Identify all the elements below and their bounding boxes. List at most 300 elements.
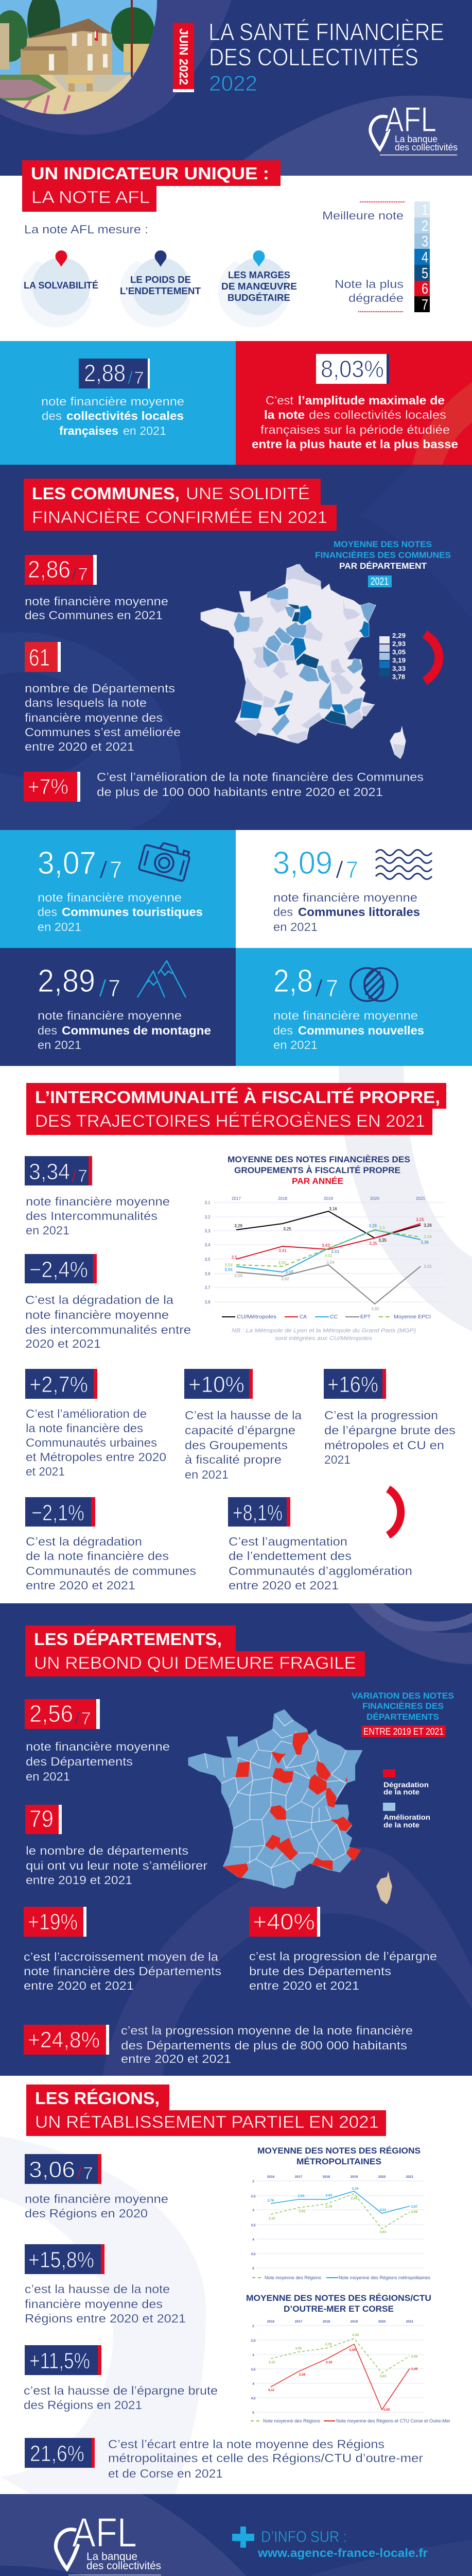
text: accroissement moyen: note financière des Départements [24, 1964, 221, 1978]
text: départements améliorés [25, 682, 181, 753]
chart: groupements à fiscalité propre: 3,35 [369, 1241, 377, 1246]
stat: 3,06/7 [25, 2154, 101, 2184]
text: 800 000 habitants: c’est la progression moyenne de la note financière [121, 2024, 413, 2037]
map legend: 2,93 [392, 640, 406, 648]
stat: +8,1%: +8,1% [233, 1500, 283, 1526]
text: épargne brute: de l’épargne brute des [324, 1423, 456, 1437]
panel: communes littorales: des [273, 905, 293, 919]
chart: groupements à fiscalité propre: 3,29 [234, 1224, 242, 1228]
panel: amplitude maximale: françaises sur la période étudiée [260, 423, 450, 436]
text: départements améliorés: entre 2020 et 2021 [25, 740, 134, 753]
panel: communes littorales: Communes littorales [298, 905, 420, 919]
stat: +19%: +19% [28, 1909, 78, 1935]
chart: régions métropolitaines: 2,87 [411, 2205, 418, 2209]
stat: +11,5%: +11,5% [29, 2348, 90, 2374]
stat: 2,86/7: 7 [78, 565, 88, 584]
text: communautés de communes: de la note financière des [26, 1549, 169, 1563]
panel: amplitude maximale: la note [264, 408, 305, 421]
chart: groupements à fiscalité propre: 3,59 [234, 1274, 242, 1278]
chart: groupements à fiscalité propre: 3,35 [378, 1238, 387, 1243]
chart: groupements à fiscalité propre: 3,29 [369, 1224, 377, 1228]
chart: groupements à fiscalité propre: GROUPEMENTS À FISCALITÉ PROPRE [234, 1165, 400, 1175]
chart: groupements à fiscalité propre: 2018 [278, 1196, 287, 1201]
map title: variation départements: FINANCIÈRES DES [362, 1701, 444, 1711]
text: 100 000 habitants: C’est l’amélioration de la note financière des Communes [97, 770, 424, 784]
decorative red arc [388, 1489, 401, 1535]
stat: 21,6%: 21,6% [30, 2441, 84, 2466]
panel: amplitude maximale [236, 341, 472, 465]
map: France communes [201, 564, 406, 759]
stat: 61 [25, 642, 61, 672]
chart: groupements à fiscalité propre: 3,43 [331, 1249, 339, 1254]
chart: régions métropolitaines: 2,63 [298, 2194, 305, 2198]
intro text: La note AFL mesure : [24, 223, 148, 236]
panel: communes littorales: 3,09 [273, 845, 333, 881]
chart: groupements à fiscalité propre: 2020 [370, 1196, 379, 1201]
stat: 3,34/7 [25, 1156, 92, 1186]
text: note régions [25, 2192, 168, 2220]
text: 800 000 habitants: des Départements de plus de 800 000 habitants [121, 2039, 407, 2052]
title: LA SANTÉ FINANCIÈRE [208, 18, 444, 45]
text: communautés urbaines [26, 1407, 166, 1478]
chart note [232, 1328, 416, 1342]
map legend: de la note [383, 1821, 419, 1829]
stat: -2,1%: −2,1% [31, 1500, 84, 1526]
text: endettement: de l’endettement des [229, 1549, 352, 1563]
chart: groupements à fiscalité propre: MOYENNE DES NOTES FINANCIÈRES DES [228, 1155, 410, 1164]
panel: communes de montagne: des [38, 1024, 57, 1037]
chart: régions métropolitaines: 3,15 [269, 2217, 275, 2221]
measure: solvabilité: LA SOLVABILITÉ [24, 280, 98, 291]
text: épargne brute régions: des Régions en 2021 [24, 2398, 142, 2412]
chart legend: CA [300, 1314, 307, 1320]
text: accroissement moyen: entre 2020 et 2021 [24, 1979, 134, 1992]
stat: 3,34/7: 7 [78, 1166, 88, 1186]
chart: régions métropolitaines: 2018 [323, 2175, 330, 2179]
chart: régions métropolitaines: 2,34 [352, 2187, 359, 2191]
chart: régions métropolitaines: MÉTROPOLITAINES [296, 2157, 381, 2166]
stat: 2,86/7: 2,86 [28, 556, 71, 583]
logo AFL: La banque [395, 134, 438, 144]
panel: départements [0, 1603, 472, 2076]
footer [0, 2494, 472, 2576]
chart legend: CU/Métropoles [237, 1314, 276, 1320]
chart: groupements à fiscalité propre: 3,62 [281, 1277, 289, 1281]
title [208, 18, 444, 95]
chart note: NB : La Métropole de Lyon et la Métropole du Grand Paris (MGP) [232, 1328, 416, 1334]
map: Corsica [376, 1871, 392, 1904]
stat: -2,4%: −2,4% [29, 1257, 88, 1282]
text: épargne brute départements [249, 1950, 437, 1992]
text: 800 000 habitants [121, 2024, 413, 2065]
map title: communes par département [315, 539, 451, 587]
chart: groupements à fiscalité propre: 3,43 [322, 1243, 330, 1248]
chart: régions outre-mer et Corse [246, 2293, 450, 2424]
stat: 2,88/7 [79, 359, 150, 388]
stat: 3,06/7: 7 [83, 2164, 93, 2183]
stat: 61: 61 [29, 644, 50, 671]
panel: communes littorales: note financière moyenne [273, 891, 417, 904]
stat: 2,56/7: / [75, 1709, 80, 1728]
text: épargne brute régions: c’est la hausse de l’épargne brute [24, 2384, 218, 2397]
panel: régions [0, 2084, 450, 2494]
stat: 2,56/7: 2,56 [29, 1700, 73, 1727]
logo AFL [56, 2510, 161, 2575]
panel: amplitude maximale: l’amplitude maximale de [298, 394, 445, 407]
panel: amplitude maximale: C’est [266, 394, 294, 407]
heading: un indicateur unique: UN INDICATEUR UNIQUE : [31, 164, 269, 183]
stat: 3,34/7: 3,34 [29, 1159, 70, 1184]
chart: régions outre-mer et Corse: 4,11 [268, 2388, 275, 2392]
chart legend: Note moyenne des Régions et CTU Corse et Outre-Mer [336, 2418, 450, 2424]
text: capacité d'épargne: capacité d’épargne [185, 1423, 295, 1437]
chart: régions outre-mer et Corse: MOYENNE DES NOTES DES RÉGIONS/CTU [246, 2293, 431, 2303]
chart: régions métropolitaines: 2,43 [351, 2197, 358, 2200]
panel: note moyenne collectivités: collectivités locales [66, 409, 184, 422]
map legend: 3,05 [392, 648, 406, 656]
logo AFL: La banque [86, 2551, 137, 2563]
text: endettement: C’est l’augmentation [229, 1535, 347, 1548]
panel: communes nouvelles: des [273, 1024, 293, 1037]
text: épargne brute: métropoles et CU en [324, 1438, 444, 1452]
chart: régions outre-mer et Corse: 2020 [378, 2320, 386, 2324]
stat: +2,7%: +2,7% [29, 1372, 88, 1397]
stat: 79 [25, 1805, 62, 1834]
chart: régions outre-mer et Corse: 2021 [406, 2320, 414, 2324]
text: communautés urbaines: la note financière des [26, 1421, 143, 1435]
heading: régions: LES RÉGIONS, [35, 2089, 160, 2108]
heading: un indicateur unique [22, 160, 281, 212]
text: 800 000 habitants: entre 2020 et 2021 [121, 2052, 231, 2065]
chart: régions métropolitaines: 2017 [295, 2175, 303, 2179]
map: Corsica [390, 726, 406, 759]
measure: marges de manoeuvre: LES MARGES [228, 270, 290, 280]
chart: groupements à fiscalité propre: 3,5 [231, 1255, 237, 1260]
chart legend: CC [330, 1314, 338, 1320]
icon: camera [138, 839, 191, 882]
text: note régions: des Régions en 2020 [25, 2207, 148, 2220]
text: capacité d'épargne: à fiscalité propre [185, 1453, 282, 1466]
text: départements améliorés: financière moyenne des [25, 711, 163, 724]
panel: communes touristiques: Communes touristiques [62, 905, 203, 919]
chart: régions outre-mer et Corse: 2016 [267, 2320, 275, 2324]
text: dégradation [25, 1293, 191, 1350]
panel: communes touristiques: en 2021 [38, 920, 81, 934]
rating scale: 3 [422, 233, 428, 250]
panel: note moyenne collectivités: en 2021 [123, 424, 166, 437]
text: communautés de communes: C’est la dégradation [26, 1535, 142, 1548]
panel: communes de montagne: / [99, 975, 107, 1002]
panel: communes littorales [236, 830, 472, 948]
chart: régions outre-mer et Corse: 2,79 [325, 2343, 332, 2346]
chart: groupements à fiscalité propre: 3,54 [224, 1263, 233, 1267]
panel: communes touristiques: / [99, 856, 108, 883]
decorative red arc [425, 634, 439, 681]
panel: communes de montagne: 2,89 [38, 963, 95, 999]
chart: régions outre-mer et Corse: 2018 [323, 2320, 330, 2324]
chart legend: Note moyenne des Régions [265, 2275, 321, 2281]
date tag: JUIN 2022 [177, 28, 190, 85]
text: épargne brute: C’est la progression [324, 1409, 438, 1422]
text: note intercommunalités: en 2021 [26, 1224, 69, 1237]
panel: amplitude maximale: des collectivités locales [309, 408, 446, 421]
text: note départements: note financière moyenne [26, 1740, 170, 1753]
map title: communes par département: MOYENNE DES NOTES [334, 539, 432, 549]
rating scale: 7 [422, 297, 428, 313]
chart: régions outre-mer et Corse: 2,91 [295, 2347, 302, 2350]
text: 100 000 habitants: de plus de 100 000 habitants entre 2020 et 2021 [97, 785, 383, 799]
chart: régions outre-mer et Corse: D’OUTRE-MER ET CORSE [284, 2304, 394, 2314]
heading: les communes: FINANCIÈRE CONFIRMÉE EN 2021 [32, 508, 327, 527]
chart: groupements à fiscalité propre: 3,34 [424, 1234, 432, 1239]
chart: groupements à fiscalité propre: 3,26 [424, 1223, 432, 1228]
heading: régions: UN RÉTABLISSEMENT PARTIEL EN 2021 [35, 2112, 379, 2131]
logo AFL: des collectivités [86, 2560, 161, 2572]
rating scale: Meilleure note [322, 209, 404, 222]
heading: intercommunalité [26, 1083, 446, 1135]
map legend: 3,19 [392, 656, 406, 664]
text: 79 départements: qui ont vu leur note s’améliorer [26, 1859, 207, 1872]
chart: groupements à fiscalité propre: 3,7 [204, 1285, 211, 1290]
chart: régions métropolitaines: 3,06 [411, 2210, 418, 2214]
chart: groupements à fiscalité propre: 3,6 [204, 1272, 211, 1276]
text: communautés urbaines: et 2021 [26, 1465, 65, 1478]
map title: communes par département: 2021 [371, 576, 389, 587]
panel: communes touristiques: des [38, 905, 57, 919]
panel: communes nouvelles: 7 [326, 975, 338, 1002]
chart: groupements à fiscalité propre: 3,3 [379, 1226, 385, 1230]
chart: groupements à fiscalité propre: 3,36 [421, 1240, 429, 1245]
logo AFL: des collectivités [395, 142, 458, 152]
chart: régions métropolitaines: 2,5 [251, 2195, 256, 2198]
text: capacité d'épargne: C’est la hausse de la [185, 1409, 302, 1422]
measure: marges de manoeuvre: BUDGÉTAIRE [228, 292, 290, 303]
icon: waves [376, 850, 432, 879]
chart: régions métropolitaines: 2019 [351, 2175, 358, 2179]
chart: groupements à fiscalité propre: 3,1 [204, 1200, 211, 1205]
chart: groupements à fiscalité propre: 3,42 [324, 1253, 333, 1258]
heading: les communes: LES COMMUNES, [32, 484, 180, 503]
chart: groupements à fiscalité propre: 3,25 [283, 1227, 291, 1231]
stat: 3,34/7: / [72, 1166, 77, 1186]
chart: régions métropolitaines: 4 [252, 2238, 254, 2242]
chart: régions outre-mer et Corse: 2 [252, 2325, 254, 2328]
text: dégradation: des intercommunalités entre [25, 1323, 191, 1336]
chart: régions métropolitaines: 3 [252, 2209, 254, 2212]
heading: les communes [24, 479, 337, 531]
rating scale [322, 201, 430, 313]
text: endettement [229, 1535, 412, 1592]
chart legend [222, 1314, 431, 1320]
text: accroissement moyen [24, 1950, 221, 1992]
text: hausse de la note [25, 2282, 186, 2325]
text: dégradation: C’est la dégradation de la [25, 1293, 173, 1307]
map title: variation départements: DÉPARTEMENTS [366, 1712, 439, 1722]
panel: communes littorales: en 2021 [273, 920, 318, 934]
heading: régions [26, 2084, 386, 2136]
stat: +15,8%: +15,8% [28, 2247, 94, 2273]
chart: régions métropolitaines: 2,79 [326, 2205, 333, 2209]
text: note départements: des Départements [26, 1755, 133, 1768]
chart: régions métropolitaines: 3,11 [380, 2208, 387, 2212]
chart: régions outre-mer et Corse: 5 [252, 2411, 254, 2415]
panel: communes de montagne: en 2021 [38, 1038, 81, 1052]
chart: régions outre-mer et Corse: 2,43 [353, 2333, 359, 2337]
heading: un indicateur unique: LA NOTE AFL [31, 188, 150, 207]
chart legend: EPT [360, 1314, 371, 1320]
chart: régions métropolitaines: 5 [252, 2267, 254, 2270]
text: accroissement moyen: c’est l’accroissement moyen de la [24, 1950, 218, 1963]
chart: régions métropolitaines: 2016 [267, 2175, 275, 2179]
stat: 2,56/7: 7 [81, 1709, 91, 1728]
map legend: 2,29 [392, 632, 406, 639]
panel: les communes [0, 465, 472, 830]
panel: intercommunalité [25, 1066, 472, 1592]
chart: régions outre-mer et Corse: 4,5 [251, 2397, 256, 2400]
rating scale: 2 [422, 218, 428, 234]
panel: communes de montagne [0, 948, 236, 1066]
chart: régions métropolitaines: 2,76 [268, 2199, 274, 2202]
text: écart: et de Corse en 2021 [108, 2467, 223, 2480]
map title: variation départements: VARIATION DES NOTES [352, 1691, 454, 1701]
panel: communes nouvelles: / [315, 975, 323, 1002]
chart: groupements à fiscalité propre: 3,55 [424, 1264, 432, 1269]
text: écart: C’est l’écart entre la note moyenne des Régions [108, 2437, 384, 2451]
map title: communes par département: FINANCIÈRES DES COMMUNES [315, 550, 451, 560]
stat: 3,06/7: 3,06 [29, 2157, 75, 2182]
panel: communes nouvelles: note financière moyenne [273, 1009, 418, 1022]
text: départements améliorés: dans lesquels la note [25, 696, 147, 709]
text: épargne brute: 2021 [324, 1453, 351, 1466]
panel: communes touristiques [0, 830, 236, 948]
chart legend: Moyenne EPCI [394, 1314, 431, 1320]
map legend: de la note [383, 1788, 419, 1796]
chart: régions outre-mer et Corse: 3,49 [411, 2367, 418, 2371]
stat: +24,8%: +24,8% [28, 2027, 100, 2053]
text: endettement: entre 2020 et 2021 [229, 1579, 339, 1592]
chart: groupements à fiscalité propre: 3,55 [278, 1261, 286, 1265]
stat: +7%: +7% [28, 774, 68, 799]
measure: marges de manoeuvre: DE MANŒUVRE [221, 281, 297, 292]
heading: départements: UN REBOND QUI DEMEURE FRAGILE [34, 1653, 356, 1672]
icon: cyan pin [253, 250, 265, 267]
chart: groupements à fiscalité propre: 2019 [324, 1196, 333, 1201]
text: épargne brute départements: brute des Départements [249, 1964, 391, 1978]
rating scale: dégradée [348, 292, 404, 304]
stat: 3,06/7: / [77, 2164, 82, 2183]
text: dégradation: 2020 et 2021 [25, 1337, 101, 1350]
chart: groupements à fiscalité propre: 3,82 [371, 1307, 379, 1311]
date tag [173, 23, 194, 92]
logo AFL [370, 100, 458, 156]
chart legend: Note moyenne des Régions métropolitaines [339, 2275, 430, 2281]
rating scale: 1 [422, 202, 428, 218]
stat: 2,86/7 [25, 555, 97, 585]
text: écart: métropolitaines et celle des Régions/CTU d’outre-mer [108, 2451, 423, 2465]
measure: poids de l'endettement [119, 250, 201, 328]
icon: navy pin [154, 250, 167, 267]
text: communautés urbaines: Communautés urbaines [26, 1436, 157, 1449]
map title: variation départements: ENTRE 2019 ET 2021 [363, 1726, 444, 1737]
text: capacité d'épargne: en 2021 [185, 1468, 229, 1481]
heading: départements [25, 1625, 365, 1676]
chart legend: Note moyenne des Régions [263, 2418, 320, 2424]
text: note moyenne communes: note financière moyenne [25, 595, 168, 608]
panel: note moyenne collectivités: françaises [59, 424, 118, 437]
chart: régions outre-mer et Corse: 2,65 [349, 2348, 356, 2352]
panel: note moyenne collectivités [0, 341, 236, 465]
chart: groupements à fiscalité propre: 3,5 [204, 1257, 211, 1262]
heading: départements: LES DÉPARTEMENTS, [34, 1630, 222, 1649]
chart: régions outre-mer et Corse: 3 [252, 2353, 254, 2357]
chart: groupements à fiscalité propre: 3,59 [285, 1270, 293, 1275]
chart: régions métropolitaines: 2021 [406, 2175, 414, 2179]
chart: groupements à fiscalité propre: 3,25 [416, 1217, 424, 1222]
map legend: 3,33 [392, 665, 406, 672]
map legend: Amélioration [383, 1813, 430, 1821]
stat: +10%: +10% [188, 1372, 244, 1397]
stat: 2,86/7: / [72, 565, 77, 584]
text: note moyenne communes [25, 595, 168, 622]
chart: régions métropolitaines: 2 [252, 2180, 254, 2183]
map legend [383, 1769, 430, 1829]
text: communautés de communes: entre 2020 et 2021 [26, 1579, 135, 1592]
chart: groupements à fiscalité propre: 2017 [232, 1196, 241, 1201]
chart: régions outre-mer et Corse: 3,15 [269, 2361, 275, 2364]
chart: régions métropolitaines: 3,63 [380, 2230, 387, 2234]
chart: groupements à fiscalité propre: 3,41 [278, 1248, 287, 1253]
text: communautés urbaines: C’est l’amélioration de [26, 1407, 147, 1420]
stat: 2,88/7: 2,88 [84, 360, 126, 386]
icon: mountains [137, 961, 186, 997]
text: hausse de la note: c’est la hausse de la note [25, 2282, 170, 2296]
rating scale: 4 [422, 249, 428, 266]
text: note intercommunalités [26, 1195, 170, 1237]
map legend [379, 632, 406, 681]
chart: groupements à fiscalité propre: 3,4 [204, 1243, 211, 1247]
text: info [257, 2528, 428, 2560]
panel: communes de montagne: note financière moyenne [38, 1009, 182, 1022]
text: épargne brute départements: c’est la progression de l’épargne [249, 1950, 437, 1963]
text: note départements [26, 1740, 170, 1783]
chart: groupements à fiscalité propre: 3,54 [326, 1260, 335, 1265]
text: écart [108, 2437, 423, 2480]
text: info: www.agence-france-locale.fr [257, 2546, 428, 2560]
stat: +40% [249, 1907, 320, 1937]
chart: régions outre-mer et Corse: 2019 [351, 2320, 358, 2324]
text: hausse de la note: Régions entre 2020 et 2021 [25, 2312, 186, 2325]
icon: overlapping circles [351, 968, 397, 1007]
heading: intercommunalité: DES TRAJECTOIRES HÉTÉROGÈNES EN 2021 [35, 1111, 425, 1130]
map legend: Dégradation [383, 1781, 429, 1789]
heading: intercommunalité: L’INTERCOMMUNALITÉ À FISCALITÉ PROPRE, [35, 1088, 440, 1107]
stat: 8,03%: 8,03% [321, 355, 384, 382]
text: départements améliorés: Communes s’est améliorée [25, 725, 181, 739]
chart: régions outre-mer et Corse: 3,59 [299, 2373, 306, 2377]
chart: régions métropolitaines: 2020 [378, 2175, 386, 2179]
panel: communes littorales: / [336, 856, 343, 883]
text: 79 départements: entre 2019 et 2021 [26, 1873, 132, 1887]
stat: 79: 79 [29, 1805, 54, 1832]
stat: 2,56/7 [25, 1699, 100, 1729]
chart legend [252, 2275, 430, 2281]
panel: communes touristiques: note financière moyenne [38, 891, 182, 904]
chart: régions métropolitaines [251, 2146, 430, 2281]
header banner [0, 0, 472, 176]
measure: poids de l'endettement: LE POIDS DE [130, 275, 191, 285]
logo AFL: AFL [72, 2510, 137, 2555]
text: info: D’INFO SUR : [261, 2528, 347, 2546]
